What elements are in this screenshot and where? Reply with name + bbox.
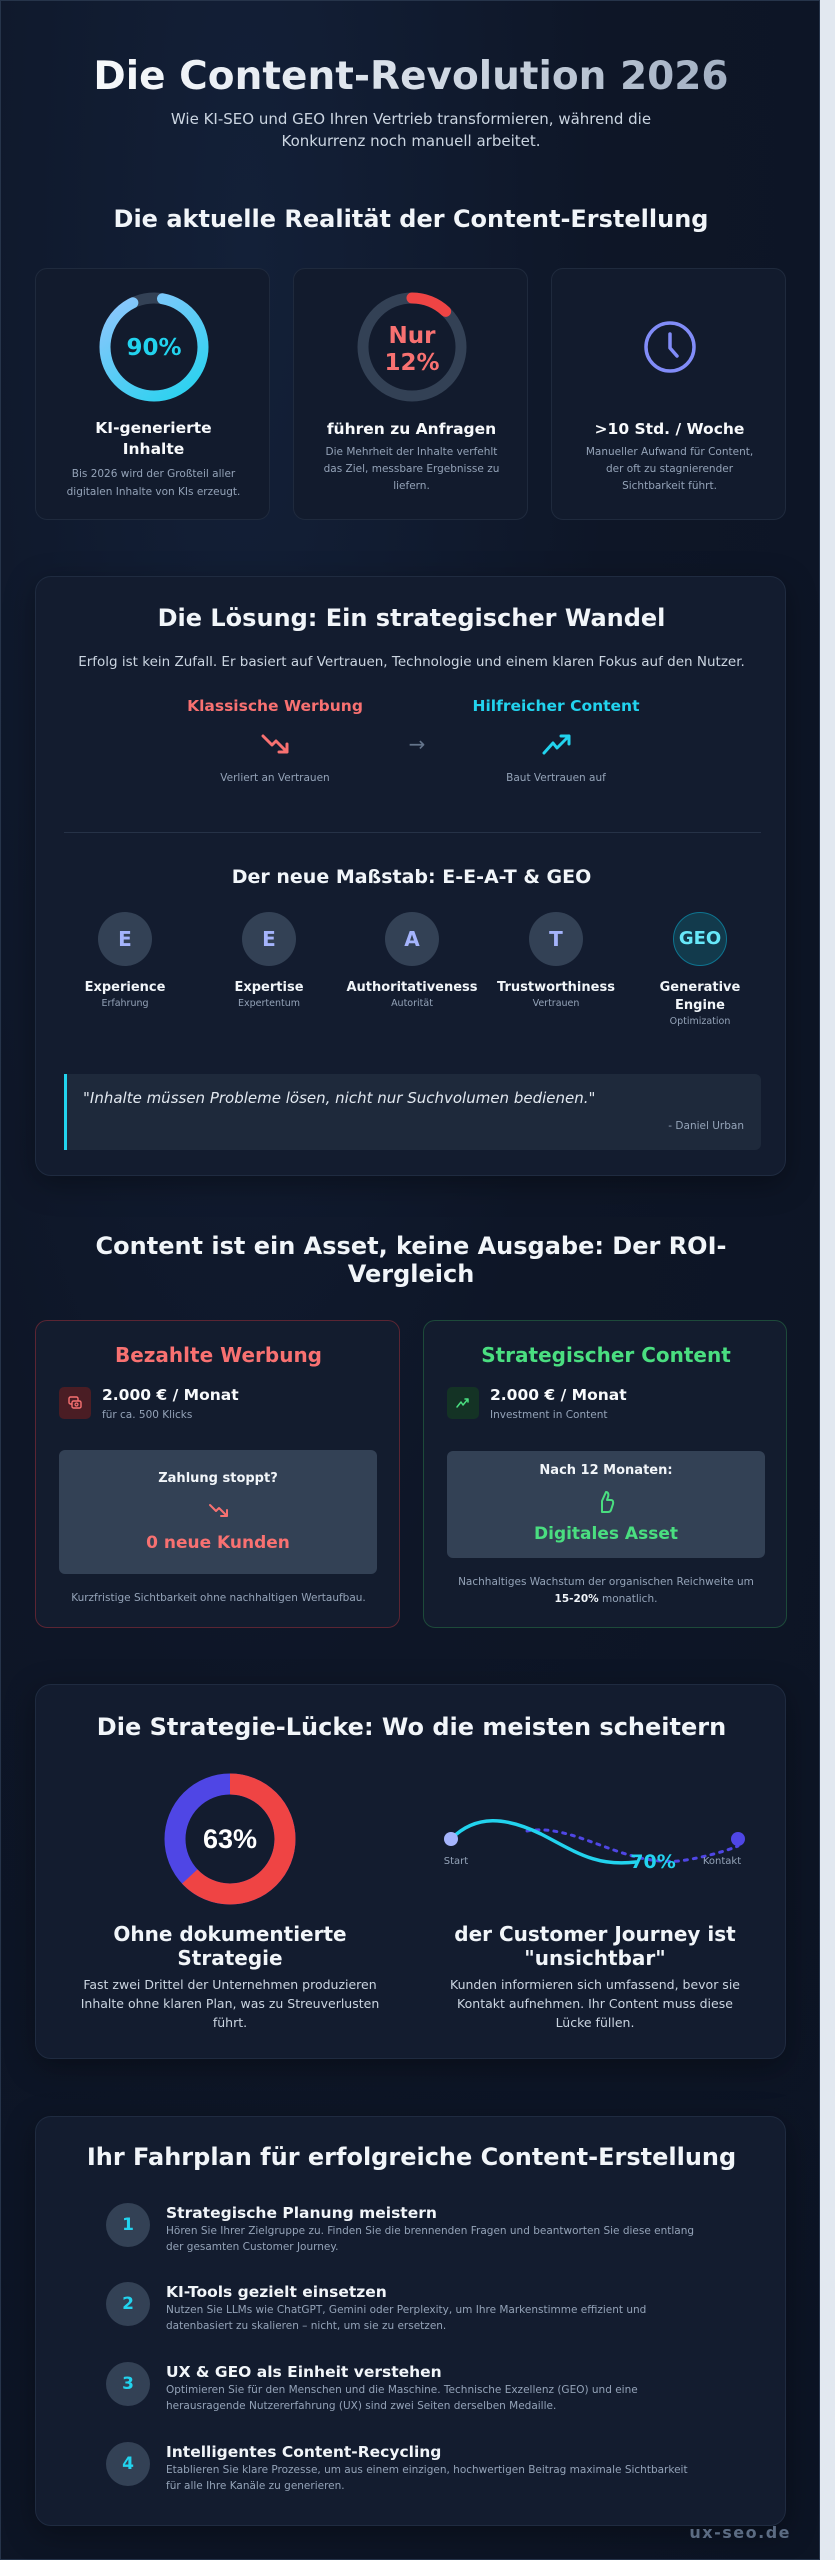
step 2: KI-Tools gezielt einsetzen (166, 2283, 387, 2301)
step 3 (106, 2362, 638, 2412)
E-E-A-T items: Optimization (670, 1016, 730, 1027)
panel: Strategie-Lücke: Fast zwei Drittel der Unternehmen produzieren (83, 1977, 377, 1992)
step 1: Hören Sie Ihrer Zielgruppe zu. Finden Sie die brennenden Fragen und beantworten Sie diese entlang (166, 2225, 694, 2237)
heading: Die Lösung: Ein strategischer Wandel (158, 604, 665, 632)
step 3: 3 (122, 2374, 134, 2394)
stat text left: Ohne dokumentierte (113, 1922, 347, 1946)
description: Sichtbarkeit führt. (622, 480, 717, 492)
quote: "Inhalte müssen Probleme lösen, nicht nur Suchvolumen bedienen." (83, 1089, 595, 1107)
heading: E-E-A-T & GEO: Der neue Maßstab: E-E-A-T & GEO (232, 866, 591, 888)
panel: Die Lösung (35, 576, 786, 1176)
card: >10 Std. / Woche (551, 268, 786, 520)
E-E-A-T items: Authoritativeness (346, 980, 478, 995)
step 3: Optimieren Sie für den Menschen und die Maschine. Technische Exzellenz (GEO) und eine (166, 2384, 638, 2396)
ring chart 12% (358, 292, 466, 402)
outcome box: 0 neue Kunden (146, 1533, 290, 1553)
step 2 (106, 2282, 646, 2332)
panel: Strategie-Lücke: Inhalte ohne klaren Plan, was zu Streuverlusten (81, 1996, 379, 2011)
E-E-A-T items: Expertise (234, 980, 304, 995)
icon: trending up (542, 734, 571, 755)
E-E-A-T items: Experience (85, 980, 165, 995)
E-E-A-T items: T (549, 927, 563, 951)
panel: Strategie-Lücke: Lücke füllen. (556, 2015, 634, 2030)
E-E-A-T items: Expertentum (238, 998, 300, 1009)
icon: money (59, 1387, 91, 1419)
panel: Strategie-Lücke: Kontakt aufnehmen. Ihr Content muss diese (457, 1996, 733, 2011)
description: das Ziel, messbare Ergebnisse zu (324, 463, 499, 475)
card: Nur 12% (293, 268, 528, 520)
ring chart 12%: Nur (389, 323, 436, 349)
panel: Strategie-Lücke: Kunden informieren sich umfassend, bevor sie (450, 1977, 740, 1992)
outcome box: Nach 12 Monaten: (539, 1463, 673, 1478)
panel: Fahrplan: Ihr Fahrplan für erfolgreiche Content-Erstellung (87, 2143, 736, 2171)
step 1: 1 (122, 2215, 134, 2235)
label: KI-generierte (95, 419, 212, 437)
E-E-A-T items: Autorität (391, 998, 433, 1009)
E-E-A-T items (85, 912, 740, 1027)
journey chart 70%: 70% (630, 1851, 676, 1873)
step 4: Intelligentes Content-Recycling (166, 2443, 441, 2461)
subtitle: Wie KI-SEO und GEO Ihren Vertrieb transformieren, während die (171, 110, 651, 128)
panel: Strategischer Content: Strategischer Content (481, 1343, 731, 1367)
subtitle (171, 110, 651, 150)
icon: trending down (261, 734, 289, 754)
quote: - Daniel Urban (668, 1120, 744, 1132)
journey chart 70% (444, 1819, 745, 1873)
step 4 (106, 2442, 688, 2492)
journey chart 70%: Kontakt (703, 1856, 741, 1867)
footer brand: ux-seo.de (689, 2523, 791, 2542)
comparison: Klassische Werbung: Klassische Werbung (187, 697, 363, 715)
comparison: Klassische Werbung (187, 697, 363, 784)
subheading: Erfolg ist kein Zufall. Er basiert auf Vertrauen, Technologie und einem klaren Fokus auf den Nutzer. (78, 654, 745, 670)
heading: ROI-Vergleich: Content ist ein Asset, keine Ausgabe: Der ROI- (96, 1232, 726, 1260)
step 1 (106, 2203, 694, 2253)
step 3: UX & GEO als Einheit verstehen (166, 2363, 442, 2381)
label: führen zu Anfragen (327, 420, 496, 438)
panel: Strategischer Content: Investment in Content (490, 1409, 607, 1421)
stat text right: "unsichtbar" (524, 1946, 666, 1970)
panel: Strategie-Lücke: führt. (213, 2015, 247, 2030)
comparison: Hilfreicher Content: Hilfreicher Content (472, 697, 640, 715)
label: >10 Std. / Woche (595, 420, 744, 438)
E-E-A-T items: E (262, 927, 276, 951)
description (586, 446, 753, 492)
E-E-A-T items: GEO (679, 928, 721, 949)
step 4: 4 (122, 2454, 134, 2474)
description (67, 468, 240, 498)
panel: Strategischer Content: Nachhaltiges Wachstum der organischen Reichweite um (458, 1576, 754, 1588)
subtitle: Konkurrenz noch manuell arbeitet. (281, 132, 540, 150)
step 4: Etablieren Sie klare Prozesse, um aus einem einzigen, hochwertigen Beitrag maximale Sichtbarkeit (166, 2464, 688, 2476)
heading: ROI-Vergleich: Vergleich (348, 1260, 474, 1288)
ring chart 12%: 12% (384, 350, 440, 376)
quote (64, 1074, 761, 1150)
step 2: 2 (122, 2294, 134, 2314)
outcome box: Zahlung stoppt? (158, 1471, 278, 1486)
E-E-A-T items: Erfahrung (101, 998, 149, 1009)
description: der oft zu stagnierender (606, 463, 733, 475)
comparison: Hilfreicher Content: Baut Vertrauen auf (506, 772, 606, 784)
stat text left (113, 1922, 347, 1970)
outcome box: Digitales Asset (534, 1524, 678, 1544)
step 3: herausragende Nutzererfahrung (UX) sind zwei Seiten derselben Medaille. (166, 2400, 556, 2412)
icon: chart up (447, 1387, 479, 1419)
step 2: Nutzen Sie LLMs wie ChatGPT, Gemini oder Perplexity, um Ihre Markenstimme effizient und (166, 2304, 646, 2316)
comparison: Klassische Werbung: Verliert an Vertrauen (220, 772, 330, 784)
E-E-A-T items: Engine (675, 998, 725, 1013)
step 1: Strategische Planung meistern (166, 2204, 437, 2222)
description: Die Mehrheit der Inhalte verfehlt (326, 446, 497, 458)
description (324, 446, 499, 492)
panel: Fahrplan (35, 2116, 786, 2526)
comparison: Hilfreicher Content (472, 697, 640, 784)
journey chart 70%: Start (444, 1856, 468, 1867)
step 1: der gesamten Customer Journey. (166, 2241, 338, 2253)
description: digitalen Inhalte von KIs erzeugt. (67, 486, 240, 498)
heading: aktuelle Realität: Die aktuelle Realität der Content-Erstellung (114, 205, 708, 233)
ring chart 90% (100, 292, 208, 402)
title: Die Content-Revolution 2026 (93, 54, 729, 99)
donut chart 63%: 63% (203, 1824, 257, 1854)
E-E-A-T items: A (404, 927, 420, 951)
step 2: datenbasiert zu skalieren – nicht, um sie zu ersetzen. (166, 2320, 446, 2332)
heading: ROI-Vergleich (96, 1232, 726, 1288)
outcome box (447, 1451, 765, 1558)
stat text right: der Customer Journey ist (454, 1922, 736, 1946)
E-E-A-T items: Trustworthiness (497, 980, 615, 995)
cost: 2.000 € / Monat (102, 1386, 239, 1404)
step 4: für alle Ihre Kanäle zu generieren. (166, 2480, 345, 2492)
donut chart 63% (164, 1774, 296, 1904)
card: 90% KI-generierte Inhalte (35, 268, 270, 520)
outcome box (59, 1450, 377, 1574)
label (95, 419, 212, 458)
panel: Bezahlte Werbung: Bezahlte Werbung (115, 1343, 322, 1367)
description: liefern. (393, 480, 430, 492)
label: Inhalte (123, 440, 184, 458)
arrow: → (409, 732, 425, 756)
E-E-A-T items: E (118, 927, 132, 951)
E-E-A-T items: Vertrauen (533, 998, 579, 1009)
panel: Strategischer Content: 15-20% monatlich. (555, 1593, 657, 1605)
cost: 2.000 € / Monat (490, 1386, 627, 1404)
description: Manueller Aufwand für Content, (586, 446, 753, 458)
panel: Strategie-Lücke: Die Strategie-Lücke: Wo die meisten scheitern (97, 1713, 726, 1741)
description: Bis 2026 wird der Großteil aller (72, 468, 235, 480)
panel: Bezahlte Werbung: für ca. 500 Klicks (102, 1409, 192, 1421)
panel: Strategischer Content (423, 1320, 787, 1628)
panel: Bezahlte Werbung: Kurzfristige Sichtbarkeit ohne nachhaltigen Wertaufbau. (71, 1592, 366, 1604)
panel: Bezahlte Werbung (35, 1320, 400, 1628)
icon: clock (644, 321, 696, 373)
ring chart 90%: 90% (126, 335, 182, 361)
icon: thumbs up (601, 1491, 614, 1513)
panel: Strategie-Lücke (35, 1684, 786, 2059)
E-E-A-T items: Generative (660, 980, 740, 995)
stat text right (454, 1922, 736, 1970)
stat text left: Strategie (177, 1946, 283, 1970)
